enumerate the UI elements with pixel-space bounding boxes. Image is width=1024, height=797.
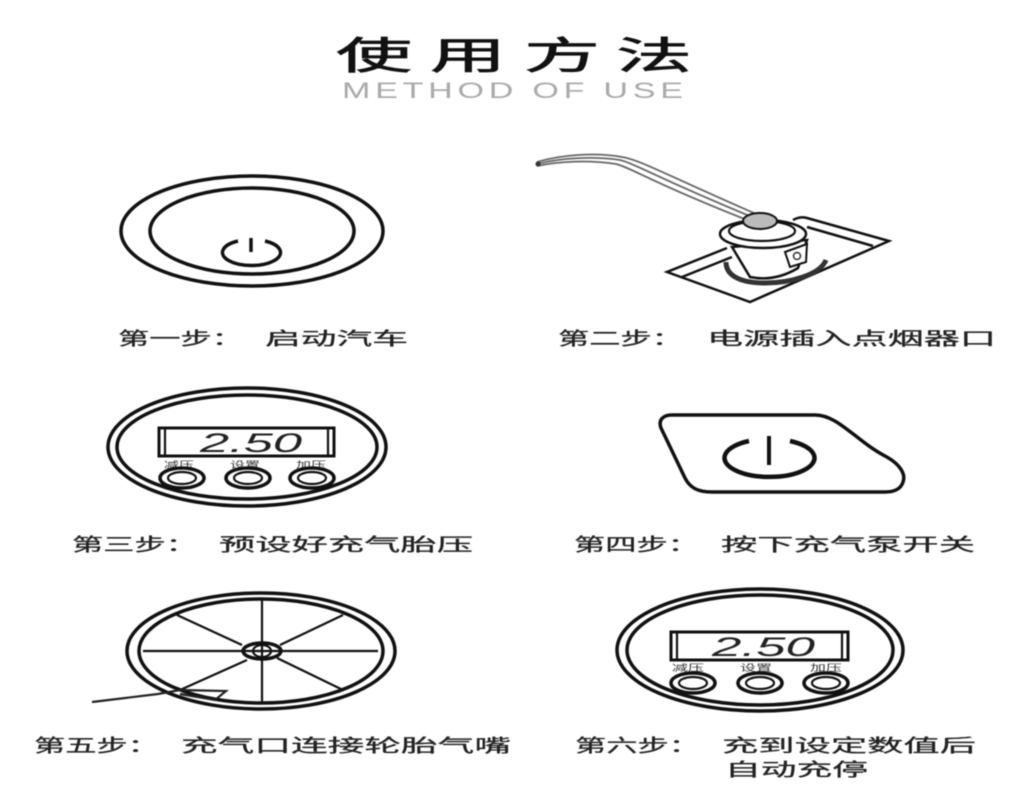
title: 法 xyxy=(616,36,692,78)
step 1 label: 第一步： xyxy=(118,329,243,349)
step 3 label: 第三步： xyxy=(72,535,197,555)
step 3 label: 预设好充气胎压 xyxy=(219,535,473,555)
step 4 label xyxy=(574,535,975,555)
icon: pump panel auto stop: 设置 xyxy=(740,663,772,673)
switch xyxy=(785,244,807,267)
icon: pump panel auto stop: 2.50 xyxy=(710,632,815,662)
icon: pump switch xyxy=(660,415,904,492)
icon: cigarette lighter plug xyxy=(536,155,889,302)
icon: pump panel preset: 减压 xyxy=(164,459,194,470)
icon: pump panel auto stop xyxy=(617,589,903,711)
step 2 label xyxy=(558,329,996,349)
icon: pump panel preset: 2.50 xyxy=(198,428,302,458)
step 5 label: 充气口连接轮胎气嘴 xyxy=(181,736,511,756)
step 2 label: 第二步： xyxy=(558,329,683,349)
icon: pump panel auto stop: 加压 xyxy=(810,663,842,673)
step 6 label: 充到设定数值后 xyxy=(722,736,976,756)
subtitle: METHOD OF USE xyxy=(342,79,683,103)
icon: start car button xyxy=(121,176,383,286)
step 2 label: 电源插入点烟器口 xyxy=(707,329,996,349)
wheel hub xyxy=(243,643,281,659)
icon: wheel with valve xyxy=(92,593,395,709)
power wires xyxy=(536,155,756,220)
step 4 label: 第四步： xyxy=(574,535,699,555)
title: 用 xyxy=(430,36,506,78)
step 6 label: 自动充停 xyxy=(725,760,868,780)
valve hose xyxy=(92,690,226,702)
plug body xyxy=(732,240,807,278)
icon: pump panel auto stop: 减压 xyxy=(672,662,704,673)
step 5 label xyxy=(34,736,511,756)
icon: pump panel preset: 设置 xyxy=(230,460,260,470)
step 1 label xyxy=(118,329,408,349)
socket plate xyxy=(667,217,889,302)
title: 使 xyxy=(336,36,412,78)
title xyxy=(336,36,692,78)
plug collar xyxy=(720,220,806,248)
step 3 label xyxy=(72,535,473,555)
step 6 label xyxy=(575,736,976,780)
icon: pump panel preset: 加压 xyxy=(296,460,326,470)
title: 方 xyxy=(524,36,600,78)
step 6 label: 第六步： xyxy=(575,736,700,756)
plug top xyxy=(743,213,777,229)
step 4 label: 按下充气泵开关 xyxy=(721,535,975,555)
step 5 label: 第五步： xyxy=(34,736,159,756)
step 1 label: 启动汽车 xyxy=(265,329,408,349)
socket ring xyxy=(726,260,826,283)
icon: pump panel preset xyxy=(108,388,386,506)
